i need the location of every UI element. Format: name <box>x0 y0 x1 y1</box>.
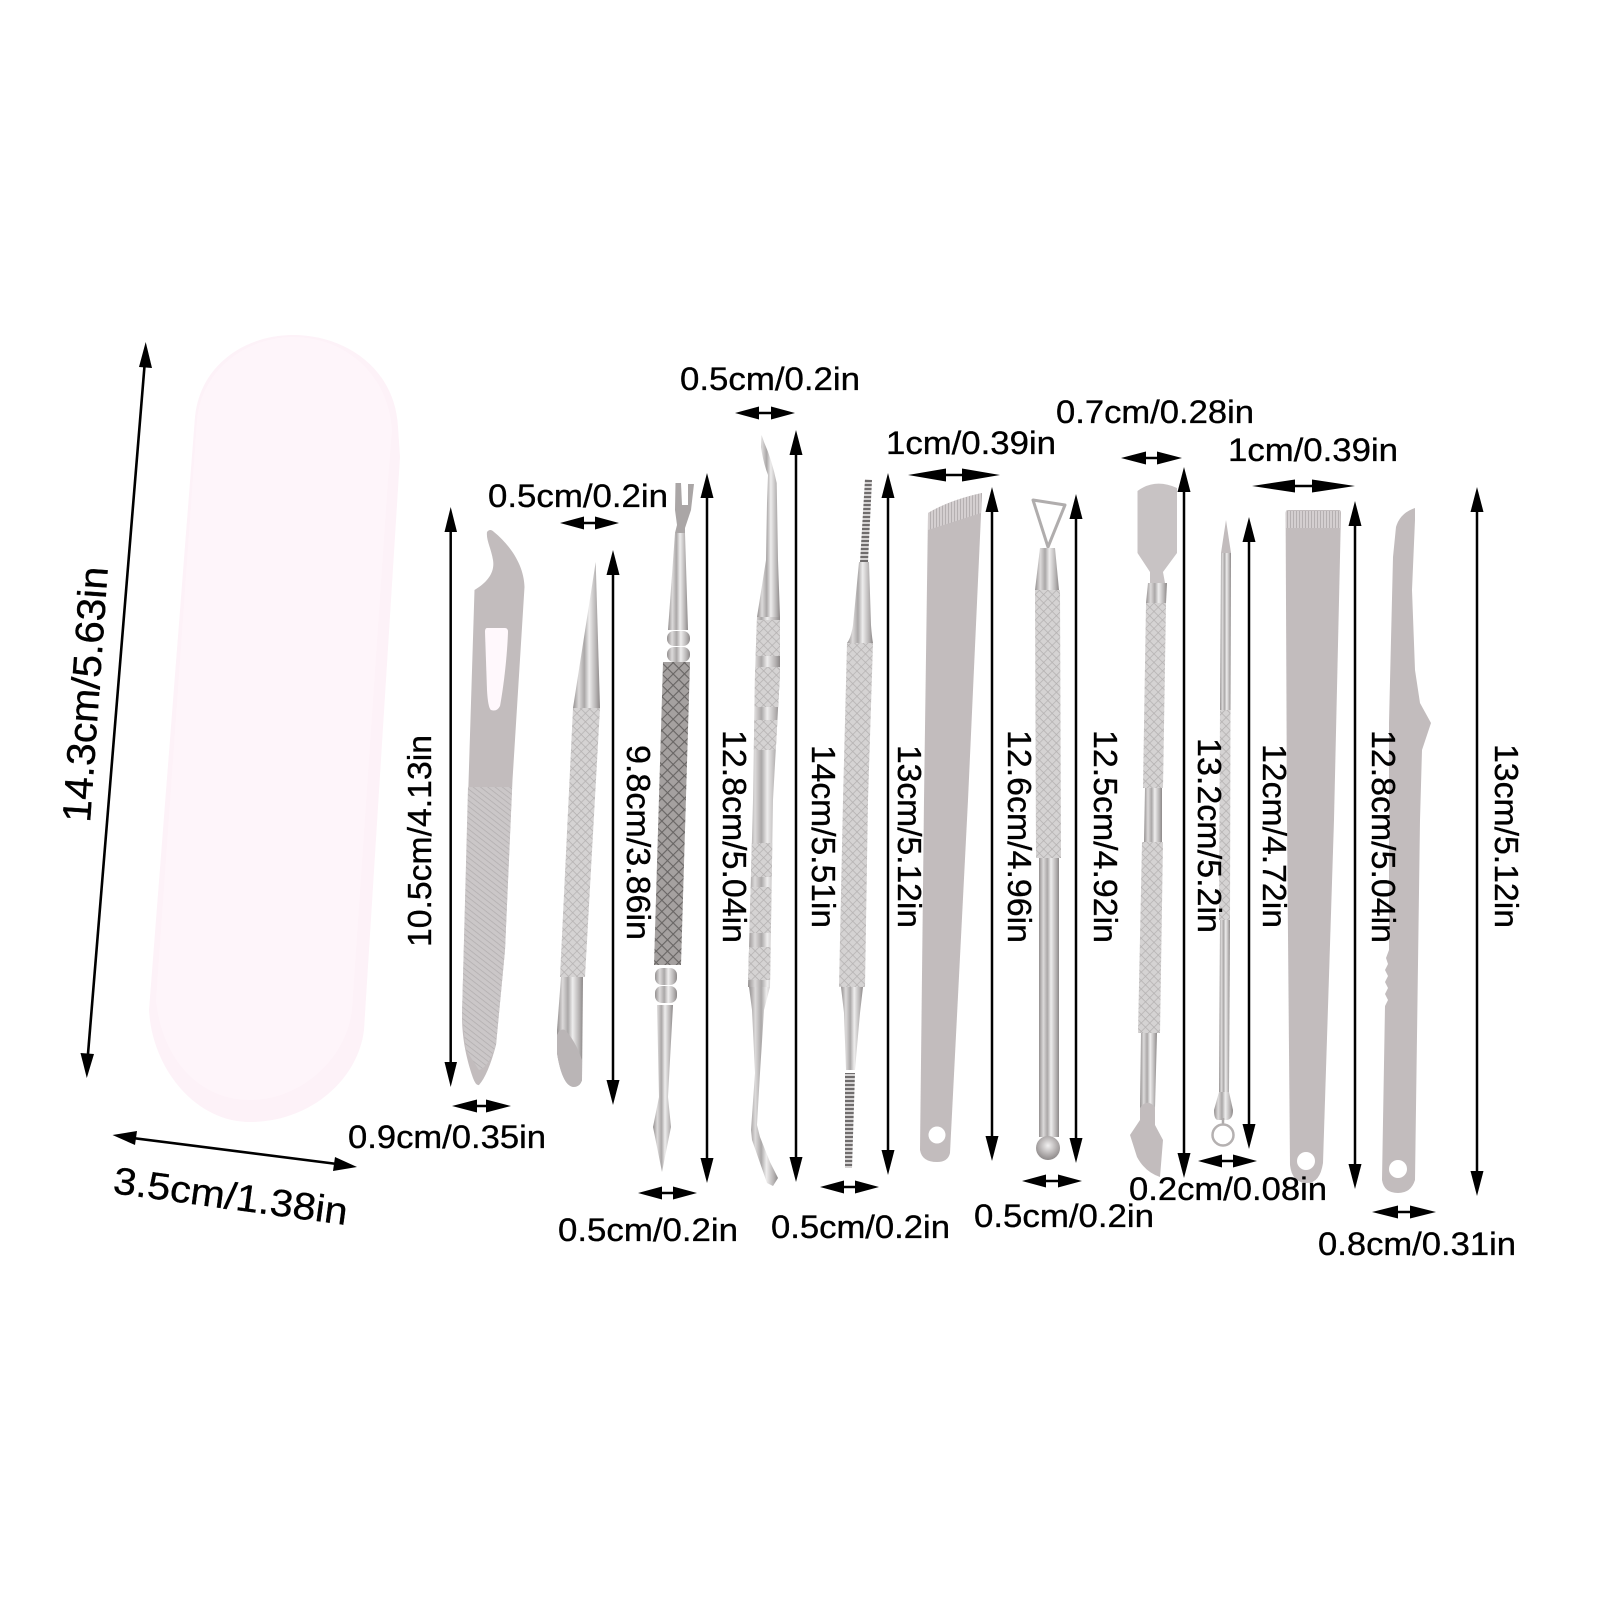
dimension: tool 4 length arrow <box>790 430 802 1182</box>
dimension: tool 6 length arrow <box>986 487 998 1161</box>
tool 11: curved serrated blade <box>1382 508 1431 1193</box>
case width label: 3.5cm/1.38in <box>111 1160 350 1234</box>
tool 8: cuticle spatula pusher <box>1130 484 1177 1177</box>
dimension: tool 9 width arrow <box>1198 1154 1257 1168</box>
dimension: tool 8 length arrow <box>1178 467 1190 1178</box>
case outer shell <box>149 335 400 1122</box>
tool 9: thin pick with loop <box>1212 520 1234 1146</box>
dimension: tool 10 width arrow <box>1252 480 1355 492</box>
dimension: tool 6 width arrow <box>908 468 1000 482</box>
tool 6: flat slanted blade <box>920 490 985 1162</box>
case height arrow <box>80 342 152 1078</box>
dimension: tool 2 length label: 9.8cm/3.86in <box>620 745 657 940</box>
dimension: tool 7 length arrow <box>1070 494 1082 1163</box>
dimension: tool 6 length label: 12.6cm/4.96in <box>1001 730 1038 943</box>
file slot <box>485 628 508 710</box>
dimension: tool 8 width arrow <box>1121 452 1182 464</box>
tool 1: nail file with hook <box>462 530 524 1085</box>
tool 7: triangle loop and ball tool <box>1033 500 1065 1160</box>
dimension: tool 3 width arrow <box>638 1186 697 1200</box>
dimension: tool 11 length label: 13cm/5.12in <box>1488 744 1525 928</box>
dimension: tool 3 length label: 12.8cm/5.04in <box>716 730 753 943</box>
dimension: tool 5 length arrow <box>882 473 894 1175</box>
dimension: tool 7 length label: 12.5cm/4.92in <box>1087 730 1124 943</box>
tool 3: forked dark-handled pusher <box>653 483 694 1172</box>
dimension: tool 3 length arrow <box>700 473 714 1183</box>
dimension: tool 9 width label: 0.2cm/0.08in <box>1129 1171 1327 1207</box>
dimension: tool 11 width arrow <box>1372 1206 1436 1218</box>
dimension: tool 11 length arrow <box>1470 487 1484 1196</box>
dimension: tool 2 width arrow <box>560 516 619 530</box>
dimension: tool 1 width arrow <box>452 1100 511 1112</box>
dimension: tool 10 length label: 12.8cm/5.04in <box>1365 730 1402 943</box>
case inner lid <box>156 337 392 1100</box>
dimension: tool 3 width label: 0.5cm/0.2in <box>558 1212 738 1248</box>
case height label: 14.3cm/5.63in <box>55 565 117 824</box>
dimension: tool 1 width label: 0.9cm/0.35in <box>348 1119 546 1155</box>
dimension: tool 6 width label: 1cm/0.39in <box>886 425 1056 461</box>
storage case <box>149 335 400 1122</box>
tool 5: rasp-ended file pick <box>839 479 873 1168</box>
dimension: tool 7 width label: 0.5cm/0.2in <box>974 1198 1154 1234</box>
tool 2: pointed pick with spatula <box>557 562 600 1087</box>
case width arrow <box>112 1131 357 1171</box>
dimension: tool 1 length label: 10.5cm/4.13in <box>401 735 438 947</box>
dimension: tool 8 width label: 0.7cm/0.28in <box>1056 394 1254 430</box>
dimension: tool 10 length arrow <box>1348 501 1362 1189</box>
infographic canvas <box>63 335 1520 1256</box>
dimension: tool 4 width arrow <box>735 406 795 420</box>
dimension: tool 8 length label: 13.2cm/5.2in <box>1191 738 1228 933</box>
tool 10: flat straight blade <box>1286 510 1341 1183</box>
dimension: tool 1 length arrow <box>444 507 457 1087</box>
dimension: tool 2 length arrow <box>606 550 620 1105</box>
dimension: tool 9 length arrow <box>1242 517 1256 1149</box>
dimension: tool 4 length label: 14cm/5.51in <box>805 745 842 928</box>
dimension: tool 7 width arrow <box>1022 1174 1082 1188</box>
dimension: tool 5 length label: 13cm/5.12in <box>891 745 928 928</box>
file body <box>462 530 524 1085</box>
file texture <box>462 787 512 1070</box>
dimension: tool 5 width label: 0.5cm/0.2in <box>771 1209 950 1245</box>
dimension: tool 2 width label: 0.5cm/0.2in <box>488 478 668 514</box>
dimension: tool 9 length label: 12cm/4.72in <box>1256 744 1293 928</box>
dimension: tool 5 width arrow <box>820 1180 879 1194</box>
dimension: tool 4 width label: 0.5cm/0.2in <box>680 361 860 397</box>
dimension: tool 10 width label: 1cm/0.39in <box>1228 432 1398 468</box>
tool 4: double-ended curette <box>748 436 780 1186</box>
dimension: tool 11 width label: 0.8cm/0.31in <box>1318 1226 1516 1262</box>
